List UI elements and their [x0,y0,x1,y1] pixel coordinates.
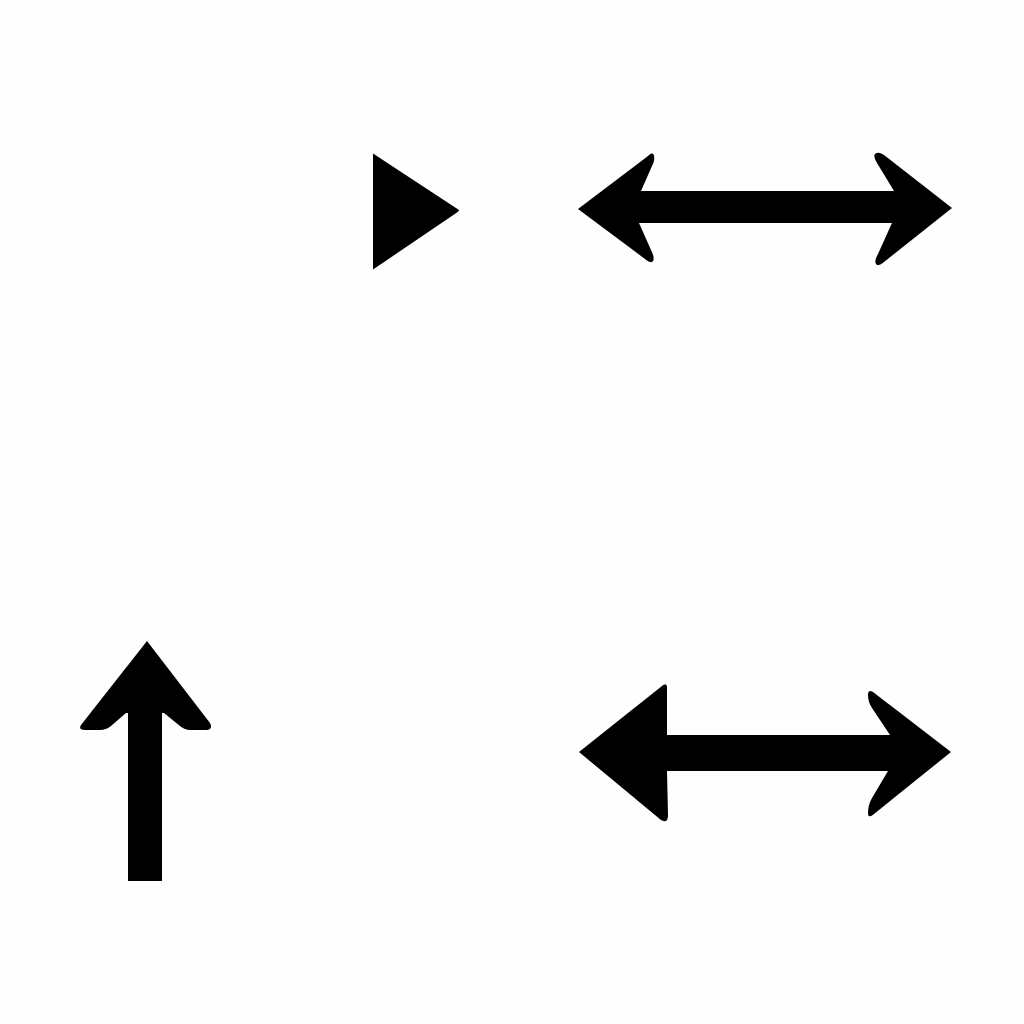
icon: right-pointing triangle [373,154,459,270]
arrow: upward arrow [80,641,211,881]
arrow: bottom double-headed horizontal arrow [579,684,951,821]
arrow: top double-headed horizontal arrow [578,153,952,265]
